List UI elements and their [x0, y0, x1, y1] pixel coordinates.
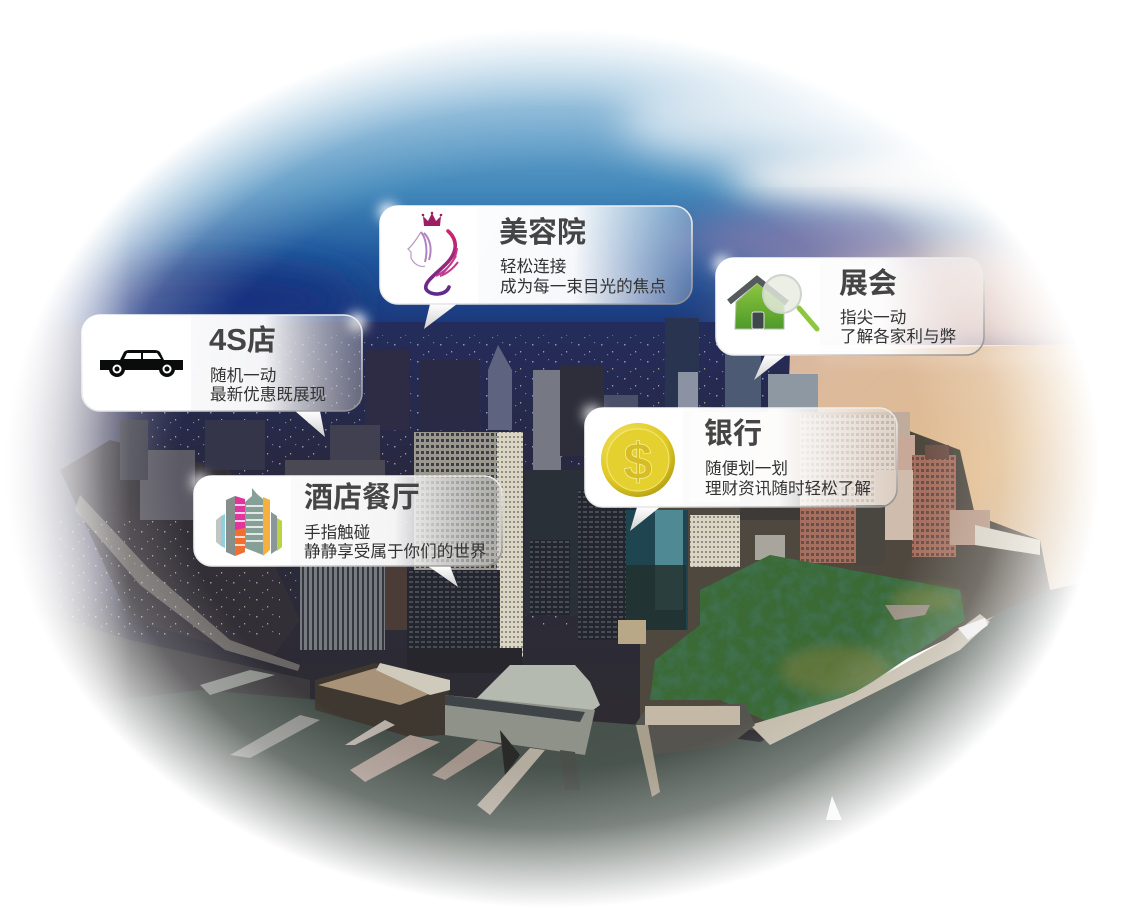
icon: crowned woman — [408, 212, 458, 294]
photo background: downtown land — [640, 405, 1050, 730]
description: 最新优惠既展现 — [210, 385, 326, 404]
icon: house with magnifier — [729, 275, 817, 329]
description: 手指触碰 — [304, 523, 370, 542]
heading: 银行 — [704, 417, 762, 450]
photo: downtown glass towers — [525, 470, 800, 644]
photo: sailboat — [826, 796, 842, 820]
description: 随便划一划 — [705, 459, 788, 478]
callout: exhibition — [714, 256, 984, 380]
photo background: distant city — [0, 322, 800, 762]
photo background: harbour water — [0, 570, 1140, 924]
heading: 酒店餐厅 — [304, 481, 420, 514]
description: 轻松连接 — [500, 257, 566, 276]
callout: hotel and restaurant — [192, 474, 502, 587]
heading: 4S店 — [209, 322, 276, 357]
icon: car — [100, 350, 183, 377]
photo: pale midtown towers — [690, 412, 1040, 565]
description: 指尖一动 — [840, 308, 906, 327]
photo: battery park trees — [650, 555, 965, 725]
icon: colourful buildings — [216, 488, 282, 556]
heading: 展会 — [839, 267, 897, 300]
photo: park promenade — [635, 605, 990, 797]
callout: beauty salon — [379, 203, 692, 329]
photo: distant skyscrapers — [120, 318, 818, 520]
icon: gold coin — [601, 423, 675, 497]
description: 成为每一束目光的焦点 — [500, 277, 666, 296]
heading: 美容院 — [499, 216, 586, 249]
description: 了解各家利与弊 — [840, 327, 957, 346]
description: 理财资讯随时轻松了解 — [705, 479, 871, 498]
photo background: hazy bay — [780, 342, 1140, 640]
callout: bank — [584, 406, 897, 531]
photo: ferry terminals — [200, 663, 600, 815]
icon: gold coin: $ — [624, 433, 653, 491]
callout: 4S car dealership — [82, 313, 366, 437]
description: 随机一动 — [210, 366, 276, 385]
photo: foreground office towers — [300, 432, 523, 673]
photo background: sky — [0, 0, 1140, 360]
description: 静静享受属于你们的世界 — [304, 542, 487, 561]
